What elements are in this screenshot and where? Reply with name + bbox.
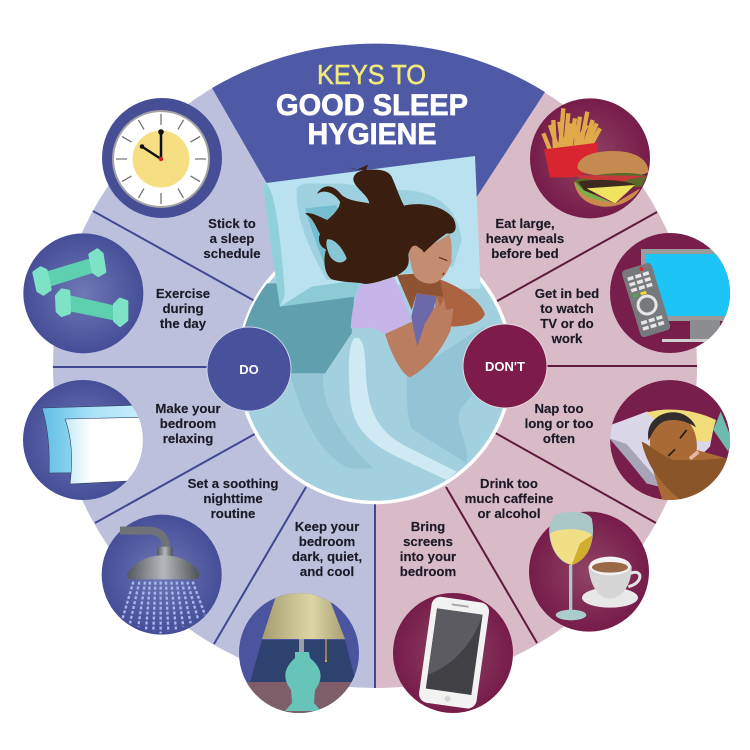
- arm and hand: [385, 297, 453, 377]
- hair: [305, 165, 456, 284]
- tip: bring screens into your bedroom: into your: [400, 549, 456, 564]
- tip: bring screens into your bedroom: Bring: [411, 519, 445, 534]
- badge: DO: [207, 327, 291, 411]
- closed eye and lips: [439, 257, 447, 275]
- tip: eat large, heavy meals before bed: heavy meals: [486, 231, 564, 246]
- tip: get in bed to watch TV or do work: to watch: [540, 301, 594, 316]
- tip: exercise during the day: the day: [160, 316, 207, 331]
- tip: eat large, heavy meals before bed: Eat large,: [495, 216, 555, 231]
- icon: bedside lamp: [239, 593, 359, 713]
- tip: nap too long or too often: Nap too: [534, 401, 584, 416]
- panel: title wedge: [212, 44, 545, 215]
- bed circle: [238, 230, 512, 502]
- tip: make your bedroom relaxing: Make your: [155, 401, 221, 416]
- badge: DON'T: [463, 324, 547, 408]
- tip: drink too much caffeine or alcohol: much caffeine: [465, 491, 553, 506]
- tip: nap too long or too often: long or too: [525, 416, 593, 431]
- badge: DON'T: DON'T: [485, 359, 525, 374]
- tip: exercise during the day: during: [162, 301, 204, 316]
- tip: get in bed to watch TV or do work: work: [551, 331, 583, 346]
- tip: set a soothing nighttime routine: nighttime: [203, 491, 263, 506]
- icon: napping person: [609, 380, 731, 503]
- tip: eat large, heavy meals before bed: before bed: [491, 246, 559, 261]
- icon: shower head: [102, 515, 222, 635]
- icon: food: [530, 98, 650, 218]
- tip: keep your bedroom dark, quiet, and cool: and cool: [300, 564, 354, 579]
- icon: pillows: [23, 380, 150, 500]
- title: GOOD SLEEP: [276, 89, 468, 122]
- tip: bring screens into your bedroom: bedroom: [400, 564, 456, 579]
- tip: nap too long or too often: often: [543, 431, 575, 446]
- far shoulder and arm: [420, 279, 485, 327]
- icon: clock: [102, 98, 222, 218]
- tip: get in bed to watch TV or do work: Get in bed: [535, 286, 599, 301]
- tip: keep your bedroom dark, quiet, and cool: Keep your: [295, 519, 359, 534]
- icon: television and remote: [610, 233, 736, 353]
- tip: set a soothing nighttime routine: routine: [211, 506, 255, 521]
- tip: drink too much caffeine or alcohol: or alcohol: [477, 506, 541, 521]
- tip: get in bed to watch TV or do work: TV or do: [540, 316, 594, 331]
- illustration: sleeping woman in bed: [238, 156, 512, 502]
- neck: [397, 273, 443, 310]
- icon: smartphone: [393, 593, 513, 713]
- tip: drink too much caffeine or alcohol: Drink too: [480, 476, 538, 491]
- tip: make your bedroom relaxing: relaxing: [163, 431, 213, 446]
- tip: stick to a sleep schedule: Stick to: [208, 216, 256, 231]
- ear: [409, 246, 421, 264]
- tip: set a soothing nighttime routine: Set a soothing: [188, 476, 278, 491]
- held pillow: [411, 293, 437, 349]
- pillow: [263, 156, 481, 307]
- tip: stick to a sleep schedule: schedule: [203, 246, 261, 261]
- tip: bring screens into your bedroom: screens: [403, 534, 453, 549]
- tip: keep your bedroom dark, quiet, and cool: bedroom: [299, 534, 355, 549]
- icon: wine glass and coffee cup: [529, 512, 649, 632]
- title: [276, 59, 468, 151]
- title: HYGIENE: [308, 118, 436, 151]
- badge: DO: DO: [239, 362, 259, 377]
- tip: exercise during the day: Exercise: [156, 286, 210, 301]
- blanket and headboard shading: [240, 283, 487, 480]
- panel: don't section background: [375, 44, 697, 688]
- title: KEYS TO: [317, 59, 426, 90]
- tip: make your bedroom relaxing: bedroom: [160, 416, 216, 431]
- face: [410, 234, 452, 284]
- t-shirt: [351, 277, 412, 334]
- tip: keep your bedroom dark, quiet, and cool: dark, quiet,: [292, 549, 362, 564]
- woman: [305, 165, 485, 377]
- hair gap: [326, 239, 347, 262]
- panel: do section background: [53, 44, 375, 688]
- tip: stick to a sleep schedule: a sleep: [210, 231, 254, 246]
- icon: dumbbells: [23, 233, 143, 353]
